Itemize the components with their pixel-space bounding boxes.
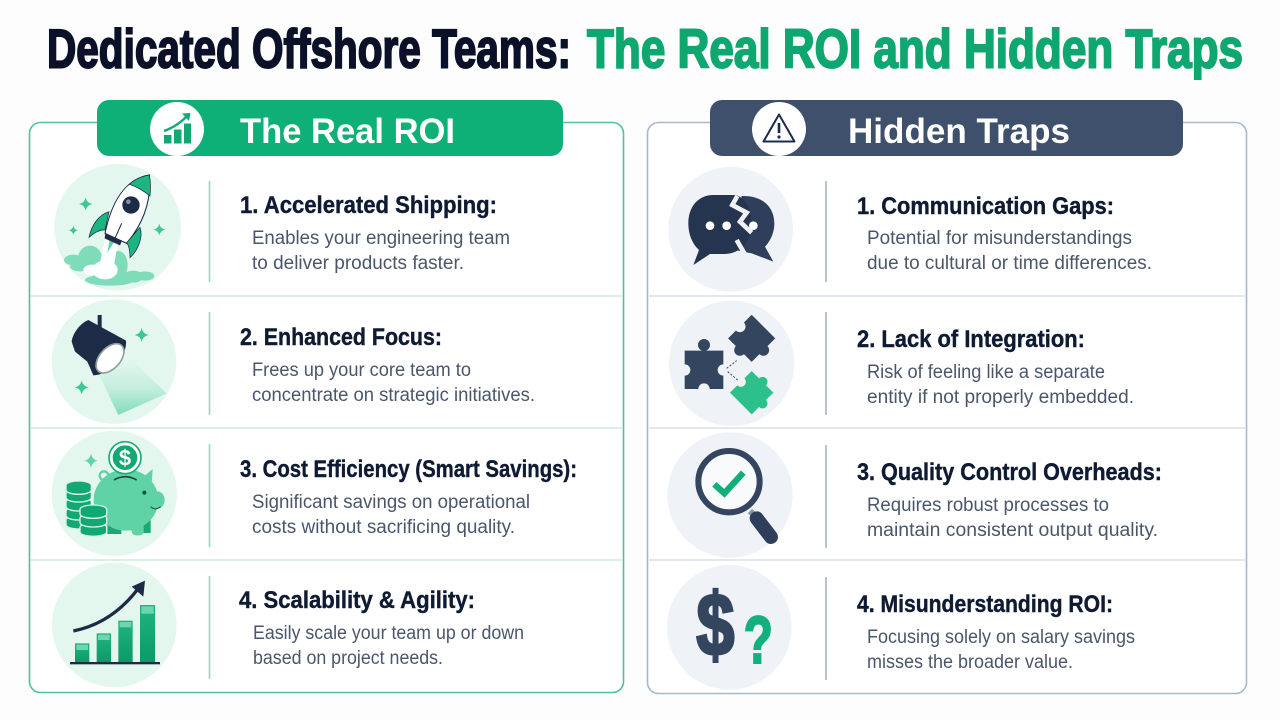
heading: 3. Quality Control Overheads: — [857, 459, 1162, 486]
description: maintain consistent output quality. — [867, 520, 1158, 541]
description: entity if not properly embedded. — [867, 387, 1134, 408]
icon: rising bars and arrow — [52, 563, 177, 687]
header: the real ROI — [97, 100, 563, 156]
description — [867, 627, 1135, 673]
heading: 1. Accelerated Shipping: — [240, 192, 497, 219]
description — [252, 492, 530, 538]
description: Significant savings on operational — [252, 492, 530, 513]
title: Dedicated Offshore Teams: — [47, 18, 571, 80]
description: to deliver products faster. — [252, 253, 464, 274]
description: Enables your engineering team — [252, 228, 510, 249]
icon: piggy bank and coins: $ — [119, 446, 131, 471]
description: Frees up your core team to — [252, 360, 471, 381]
heading: 4. Scalability & Agility: — [239, 587, 475, 614]
panel: hidden traps — [648, 100, 1246, 694]
description: costs without sacrificing quality. — [252, 517, 515, 538]
icon: warning badge — [752, 102, 806, 156]
description — [252, 360, 535, 406]
icon: dollar and question mark: $ — [696, 575, 734, 674]
icon: piggy bank and coins — [52, 431, 177, 556]
description: due to cultural or time differences. — [867, 253, 1152, 274]
row: misunderstanding ROI — [667, 565, 1135, 690]
description: Potential for misunderstandings — [867, 228, 1132, 249]
description — [867, 495, 1158, 541]
description: misses the broader value. — [867, 652, 1073, 673]
header text: The Real ROI — [240, 112, 455, 151]
row: cost efficiency — [52, 431, 577, 556]
row: communication gaps — [668, 167, 1152, 292]
panel: the real ROI — [30, 100, 624, 692]
row: scalability and agility — [52, 563, 524, 687]
row: quality control overheads — [667, 432, 1162, 558]
heading: 2. Enhanced Focus: — [240, 324, 442, 351]
row: enhanced focus — [52, 299, 535, 424]
icon: dollar and question mark — [667, 565, 792, 690]
description: based on project needs. — [253, 648, 443, 669]
icon: spotlight — [52, 299, 176, 424]
icon: growth chart badge — [150, 102, 204, 156]
description — [252, 228, 510, 274]
icon: rocket — [54, 164, 181, 291]
description — [253, 623, 524, 669]
heading: 1. Communication Gaps: — [857, 193, 1114, 220]
heading: 2. Lack of Integration: — [857, 326, 1085, 353]
description: concentrate on strategic initiatives. — [252, 385, 535, 406]
icon: dollar and question mark: ? — [744, 604, 773, 678]
row: accelerated shipping — [54, 164, 510, 291]
icon: broken speech bubbles — [668, 167, 793, 292]
icon: puzzle pieces — [669, 301, 794, 426]
description — [867, 362, 1134, 408]
icon: magnifier with check — [667, 432, 793, 558]
header text: Hidden Traps — [848, 112, 1070, 151]
description — [867, 228, 1152, 274]
description: Focusing solely on salary savings — [867, 627, 1135, 648]
title — [47, 18, 1243, 80]
description: Requires robust processes to — [867, 495, 1109, 516]
heading: 3. Cost Efficiency (Smart Savings): — [240, 456, 577, 483]
description: Risk of feeling like a separate — [867, 362, 1105, 383]
header: hidden traps — [710, 100, 1183, 156]
heading: 4. Misunderstanding ROI: — [857, 591, 1113, 618]
description: Easily scale your team up or down — [253, 623, 524, 644]
row: lack of integration — [669, 301, 1134, 426]
